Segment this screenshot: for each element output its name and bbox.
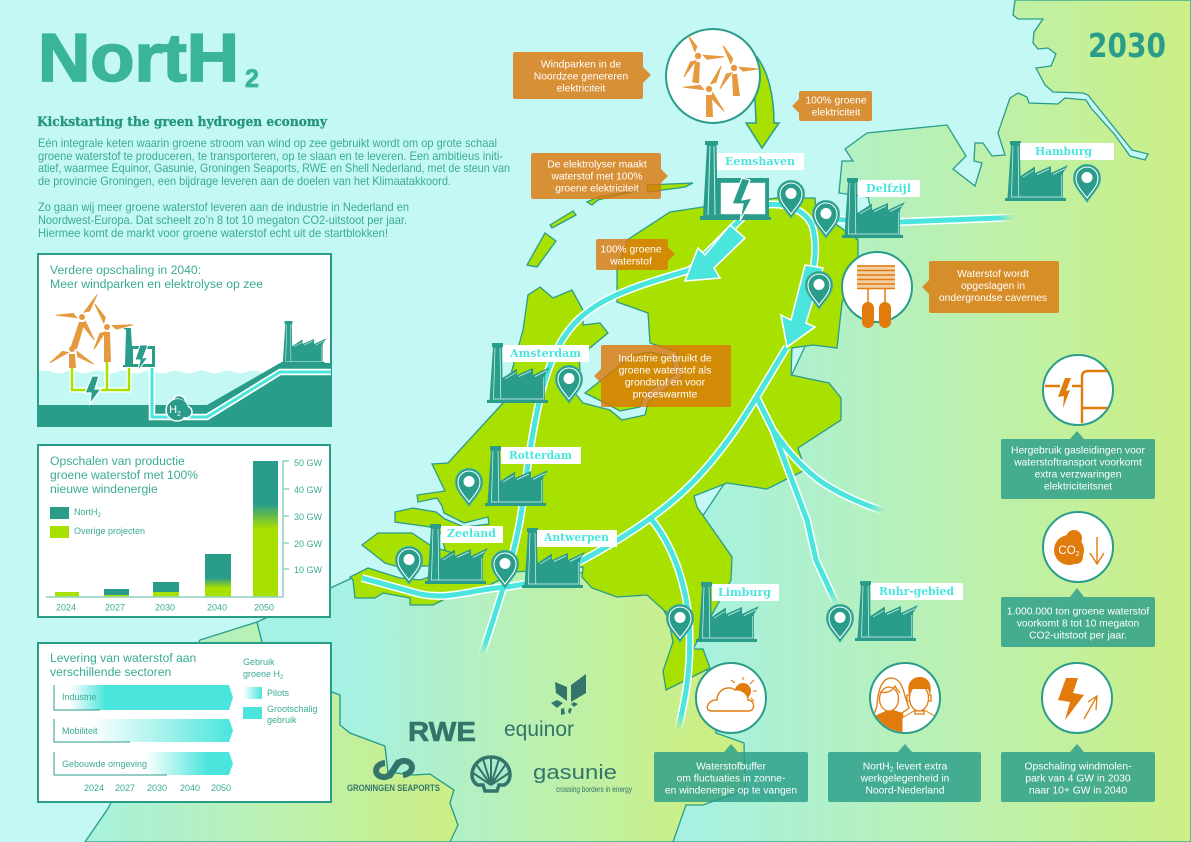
intro text: Zo gaan wij meer groene waterstof leveren aan de industrie in Nederland en: [38, 201, 409, 214]
panel heading: Levering van waterstof aan: [50, 651, 196, 665]
callout: Industrie: [594, 345, 731, 407]
H2 bubble: [166, 396, 192, 421]
label: Rotterdam: [501, 447, 581, 464]
title: NortH2: 2: [245, 65, 259, 93]
icon: sun and cloud: [696, 663, 766, 733]
callout: De elektrolyser: waterstof met 100%: [550, 172, 642, 182]
callout: De elektrolyser: groene elektriciteit: [555, 184, 639, 194]
callout: werkgelegenheid: werkgelegenheid in: [860, 774, 950, 784]
map: Schouwen: [362, 533, 456, 566]
location pins: [396, 164, 1100, 642]
legend: Overige projecten: [74, 526, 145, 536]
panel heading: Verdere opschaling in 2040:: [50, 263, 201, 277]
arrow: hydrogen flow south: [781, 265, 823, 347]
label: Eemshaven: [717, 153, 804, 170]
logo: Groningen Seaports: GRONINGEN SEAPORTS: [347, 783, 440, 793]
bar: Mobiliteit: Mobiliteit: [62, 726, 98, 736]
callout: Windparken: Noordzee genereren: [534, 72, 628, 82]
callout: Windparken: [513, 52, 651, 99]
panel heading: [50, 263, 263, 291]
label: Zeeland: [441, 526, 503, 543]
callout: Industrie: Industrie gebruikt de: [618, 354, 712, 364]
logo: Groningen Seaports: [347, 761, 440, 793]
callout: Windparken: elektriciteit: [557, 84, 605, 94]
callout: 100% groene elektriciteit: elektriciteit: [812, 108, 860, 118]
map: Flevoland: [585, 352, 674, 411]
legend: 2: [98, 513, 102, 519]
callout: Hergebruik gasleidingen: [1001, 431, 1155, 499]
H2 bubble: 2: [177, 411, 181, 418]
sea with waves: [39, 370, 273, 406]
title: NortH2: NortH: [38, 20, 239, 96]
intro text: de provincie Groningen, een bijdrage leveren aan de doelen van het Klimaatakkoord.: [38, 175, 451, 188]
label: Limburg: [712, 584, 779, 601]
callout: 100% groene elektriciteit: [792, 91, 872, 121]
logo: Gasunie: crossing borders in energy: [556, 785, 632, 794]
logo: RWE: RWE: [408, 716, 476, 747]
timeline years: 2040: [180, 783, 200, 793]
factory: Amsterdam: [487, 343, 550, 403]
callout: Industrie: proceswarmte: [633, 390, 698, 400]
panel heading: Meer windparken en elektrolyse op zee: [50, 277, 263, 291]
map: Netherlands: [350, 198, 858, 690]
panel heading: Opschalen van productie: [50, 454, 185, 468]
label: Zeeland: Zeeland: [447, 527, 496, 540]
callout: Opschaling windmolenpark: [1001, 744, 1155, 802]
icon: CO2 reduction: [1043, 512, 1113, 582]
timeline years: 2030: [147, 783, 167, 793]
bar chart: 30 GW: [294, 512, 323, 522]
callout: 100% groene elektriciteit: 100% groene: [805, 96, 867, 106]
callout: Opschaling windmolenpark: naar 10+ GW in 2040: [1029, 786, 1127, 796]
callout: Waterstof wordt opgeslagen: ondergrondse cavernes: [939, 293, 1047, 304]
factory: Antwerpen: [522, 528, 585, 588]
logo: Equinor: [504, 674, 586, 741]
panel: opschalen productie: [38, 445, 330, 617]
H2 bubble: H: [169, 404, 177, 416]
bar chart: 2040: [207, 602, 227, 612]
callout: Waterstofbuffer: [654, 744, 808, 802]
arrow: green electricity: [745, 57, 779, 148]
callout: Hergebruik gasleidingen: extra verzwaringen: [1034, 470, 1122, 480]
seabed: [38, 363, 331, 426]
callout: Waterstofbuffer: Waterstofbuffer: [696, 762, 766, 772]
callout: werkgelegenheid: 2: [890, 766, 894, 774]
map: Germany: [672, 0, 1191, 842]
year: 2030: 2030: [1088, 26, 1166, 65]
factory: Limburg: [696, 582, 759, 642]
cables: [72, 362, 129, 390]
intro text: groene waterstof te produceren, te transporteren, op te slaan en te leveren. Een ambitieus initi-: [38, 150, 503, 163]
factory: Delfzijl: [842, 178, 905, 238]
factory: Rotterdam: [485, 446, 548, 506]
label: Eemshaven: Eemshaven: [725, 155, 795, 168]
callout: Waterstof wordt opgeslagen: opgeslagen in: [961, 281, 1025, 292]
callout: Industrie: groene waterstof als: [619, 366, 711, 376]
callout: Industrie: grondstof en voor: [625, 378, 706, 388]
factory: Ruhr-gebied: [855, 581, 918, 641]
callout: 1.000.000 ton: CO2-uitstoot per jaar.: [1029, 630, 1127, 642]
label: Antwerpen: [537, 530, 617, 547]
icon: underground caverns: [842, 252, 912, 328]
arrow: hydrogen flow west: [685, 225, 745, 281]
timeline years: 2027: [115, 783, 135, 793]
callout: werkgelegenheid: levert extra: [894, 762, 948, 772]
bar chart: 2050: [254, 602, 274, 612]
legend: groene H: [243, 669, 280, 679]
hydrogen pipelines: [362, 204, 1022, 735]
legend: Grootschalig: [267, 704, 318, 714]
bar: Gebouwde omgeving: [54, 752, 233, 775]
logo: Shell: [472, 757, 510, 791]
panel heading: [50, 454, 198, 496]
callout: werkgelegenheid: [828, 744, 981, 802]
bar chart: 2027: [105, 602, 125, 612]
legend: 2: [280, 675, 284, 681]
bar chart: 10 GW: [294, 565, 323, 575]
icon: CO2 reduction: 2: [1076, 551, 1080, 558]
offshore electrolyser: [123, 328, 155, 371]
factory and electrolyser: Eemshaven: [700, 141, 771, 221]
callout: werkgelegenheid: NortH: [863, 762, 890, 772]
panel heading: groene waterstof met 100%: [50, 468, 198, 482]
callout: Hergebruik gasleidingen: Hergebruik gasleidingen voor: [1011, 446, 1146, 456]
timeline years: 2050: [211, 783, 231, 793]
callout: Hergebruik gasleidingen: elektriciteitsnet: [1044, 482, 1112, 492]
bar: Industrie: [54, 685, 233, 710]
bar: Industrie: Industrie: [62, 692, 97, 702]
turbines: [48, 294, 133, 368]
legend: [50, 507, 145, 538]
legend: Gebruik: [243, 657, 275, 667]
callout: Hergebruik gasleidingen: waterstoftransport voorkomt: [1013, 458, 1142, 468]
map: Wadden islands: [527, 183, 693, 267]
label: Delfzijl: Delfzijl: [866, 182, 911, 195]
intro text: [38, 137, 510, 240]
bar chart: [46, 458, 323, 612]
bar chart: 2030: [155, 602, 175, 612]
callout: Windparken: Windparken in de: [541, 60, 621, 70]
callout: werkgelegenheid: Noord-Nederland: [866, 786, 945, 796]
pipeline to shore: [152, 368, 331, 417]
callout: De elektrolyser: [531, 153, 668, 199]
label: Amsterdam: Amsterdam: [509, 347, 581, 360]
icon: reused gas pipes: [1043, 355, 1113, 425]
label: Hamburg: Hamburg: [1035, 145, 1092, 158]
callout: 100% groene waterstof: [596, 239, 675, 270]
map: Belgium: [257, 565, 745, 842]
bar chart: 40 GW: [294, 485, 323, 495]
callout: 1.000.000 ton: 1.000.000 ton groene waterstof: [1007, 606, 1149, 618]
callout: Opschaling windmolenpark: Opschaling windmolen-: [1024, 762, 1132, 772]
logo: Equinor: equinor: [504, 718, 574, 741]
callout: De elektrolyser: De elektrolyser maakt: [547, 160, 647, 170]
bar chart: 2024: [56, 602, 76, 612]
icon: people: [870, 663, 940, 735]
legend: gebruik: [267, 715, 297, 725]
callout: Waterstof wordt opgeslagen: Waterstof wordt: [957, 269, 1029, 280]
legend: NortH: [74, 507, 98, 517]
icon: lightning and growth arrow: [1042, 663, 1112, 733]
bar chart: 20 GW: [294, 539, 323, 549]
label: Hamburg: [1020, 143, 1114, 160]
legend: [243, 657, 318, 725]
bar: Gebouwde omgeving: Gebouwde omgeving: [62, 759, 147, 769]
intro text: Noordwest-Europa. Dat scheelt zo’n 8 tot 10 megaton CO2-uitstoot per jaar.: [38, 214, 407, 227]
label: Antwerpen: Antwerpen: [543, 531, 609, 544]
label: Amsterdam: [503, 345, 589, 362]
panel heading: nieuwe windenergie: [50, 482, 158, 496]
intro text: Eén integrale keten waarin groene stroom van wind op zee gebruikt wordt om op grote schaal: [38, 137, 497, 150]
factory: Hamburg: [1005, 141, 1068, 201]
icon: CO2 reduction: CO: [1058, 545, 1076, 557]
panel: opschaling 2040: [38, 254, 331, 426]
callout: Waterstofbuffer: om fluctuaties in zonne-: [677, 774, 785, 784]
label: Delfzijl: [858, 180, 920, 197]
heading: Kickstarting: Kickstarting the green hydrogen economy: [37, 115, 327, 130]
callout: 1.000.000 ton: voorkomt 8 tot 10 megaton: [1017, 618, 1140, 630]
callout: Waterstof wordt opgeslagen: [922, 261, 1059, 313]
bar: Mobiliteit: [54, 719, 233, 742]
label: Ruhr-gebied: Ruhr-gebied: [879, 585, 954, 598]
label: Ruhr-gebied: [871, 583, 963, 600]
callout: Waterstofbuffer: en windenergie op te vangen: [665, 786, 797, 796]
panel heading: verschillende sectoren: [50, 665, 171, 679]
logo: Gasunie: gasunie: [533, 762, 617, 784]
legend: Pilots: [267, 688, 290, 698]
icon: wind turbines circle: [666, 29, 760, 123]
callout: 100% groene waterstof: 100% groene: [600, 244, 662, 256]
factory: Zeeland: [425, 524, 488, 584]
logo: Gasunie: [533, 762, 632, 794]
callout: 1.000.000 ton: [1001, 588, 1155, 647]
label: Limburg: Limburg: [718, 586, 771, 599]
intro text: Hiermee komt de markt voor groene waterstof echt uit de startblokken!: [38, 227, 388, 240]
panel heading: [50, 651, 196, 679]
callout: 100% groene waterstof: waterstof: [609, 256, 652, 268]
map: western land: [85, 622, 460, 842]
icon: bolt: [85, 376, 101, 404]
bar chart: 50 GW: [294, 458, 323, 468]
intro text: atief, waarmee Equinor, Gasunie, Groningen Seaports, RWE en Shell Nederland, met de steun van: [38, 162, 510, 175]
callout: Opschaling windmolenpark: park van 4 GW in 2030: [1025, 774, 1131, 784]
label: Rotterdam: Rotterdam: [509, 449, 572, 462]
panel: levering sectoren: [38, 643, 331, 802]
offshore factory: [281, 321, 326, 364]
timeline years: [84, 783, 231, 793]
timeline years: 2024: [84, 783, 104, 793]
